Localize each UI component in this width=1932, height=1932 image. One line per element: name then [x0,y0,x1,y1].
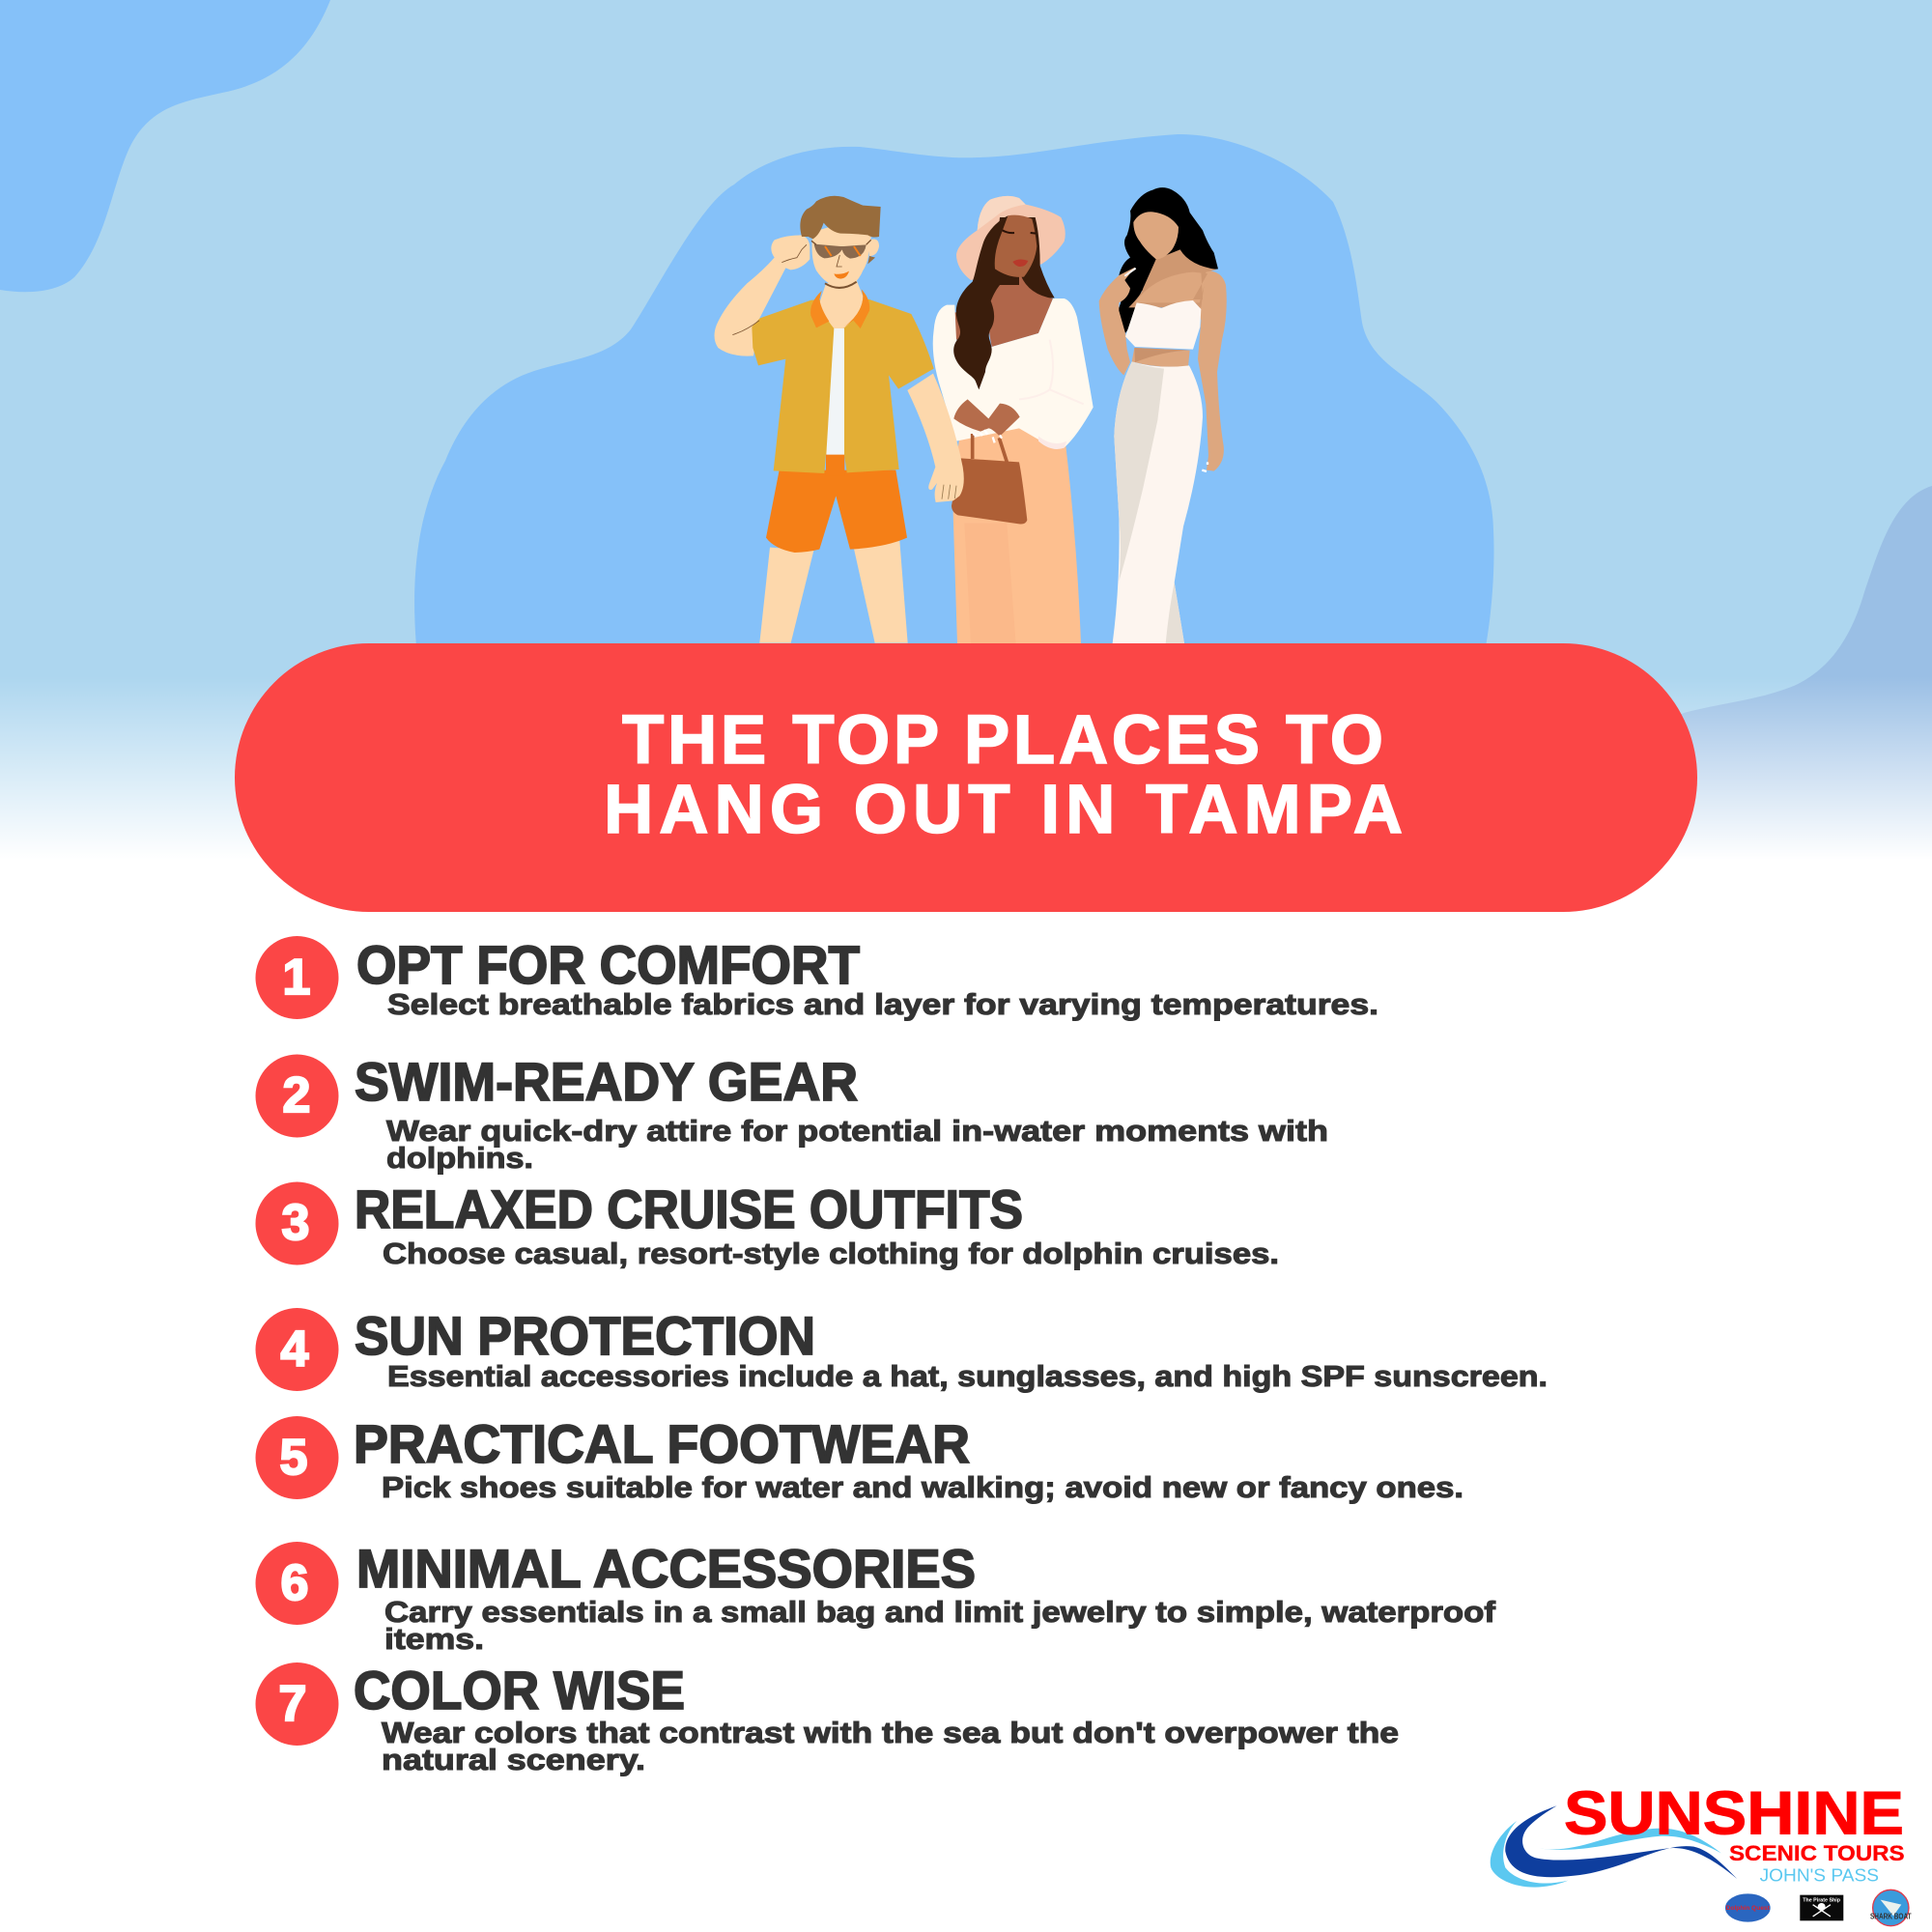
list item 5 [255,1413,1463,1504]
list item 2: 2 [283,1067,310,1123]
figure: woman in white [1099,187,1227,643]
figure: man with sunglasses [715,196,964,643]
list item 4: 4 [281,1321,309,1378]
list item 6: MINIMAL ACCESSORIES [356,1538,976,1599]
logo text: SCENIC TOURS [1729,1841,1905,1865]
list item 2: dolphins. [386,1141,533,1175]
partner logos [1725,1889,1912,1926]
list item 6 [255,1538,1496,1656]
illustration: three people [715,187,1227,644]
fade to white [0,676,1932,860]
list item 7: Wear colors that contrast with the sea but don't overpower the [382,1716,1399,1749]
list item 5: Pick shoes suitable for water and walking; avoid new or fancy ones. [382,1470,1463,1504]
partner logos: The Pirate Ship [1803,1898,1841,1904]
title text: THE TOP PLACES TO [622,702,1383,779]
list item 5: 5 [280,1430,307,1486]
partner logos: SHARK BOAT [1870,1913,1912,1921]
logo waves [1491,1805,1737,1888]
list item 1: OPT FOR COMFORT [356,934,860,995]
list item 7 [255,1660,1399,1776]
list item 6: items. [384,1622,484,1656]
list item 2: SWIM-READY GEAR [355,1051,858,1112]
list item 4 [255,1305,1548,1393]
blob: central [414,134,1494,657]
title text: HANG OUT IN TAMPA [604,772,1403,848]
list item 7: COLOR WISE [354,1660,685,1720]
partner logos: Dolphin Quest [1726,1905,1771,1912]
list item 5: PRACTICAL FOOTWEAR [354,1413,970,1474]
list item 4: SUN PROTECTION [355,1305,815,1366]
list item 6: Carry essentials in a small bag and limit jewelry to simple, waterproof [384,1595,1496,1629]
list item 3: RELAXED CRUISE OUTFITS [355,1179,1023,1239]
list item 3 [255,1179,1279,1270]
list item 1: 1 [283,950,310,1006]
background [0,0,1932,860]
figure: woman in hat [933,196,1094,644]
list item 2: Wear quick-dry attire for potential in-water moments with [386,1114,1328,1148]
title text [604,702,1403,848]
title banner [235,643,1697,912]
list item 1 [255,934,1378,1021]
blob: right [1642,486,1932,860]
list item 2 [255,1051,1328,1175]
list item 3: Choose casual, resort-style clothing for dolphin cruises. [383,1236,1279,1270]
logo: Sunshine Scenic Tours [1491,1779,1912,1926]
logo text [1564,1779,1905,1885]
list item 6: 6 [281,1555,308,1611]
logo text: SUNSHINE [1564,1779,1904,1847]
logo text: JOHN'S PASS [1760,1864,1879,1885]
list item 7: natural scenery. [382,1743,645,1776]
list item 3: 3 [282,1195,309,1251]
list item 4: Essential accessories include a hat, sunglasses, and high SPF sunscreen. [387,1359,1548,1393]
list item 7: 7 [279,1676,306,1732]
blob: top left [0,0,330,292]
list item 1: Select breathable fabrics and layer for varying temperatures. [387,987,1378,1021]
